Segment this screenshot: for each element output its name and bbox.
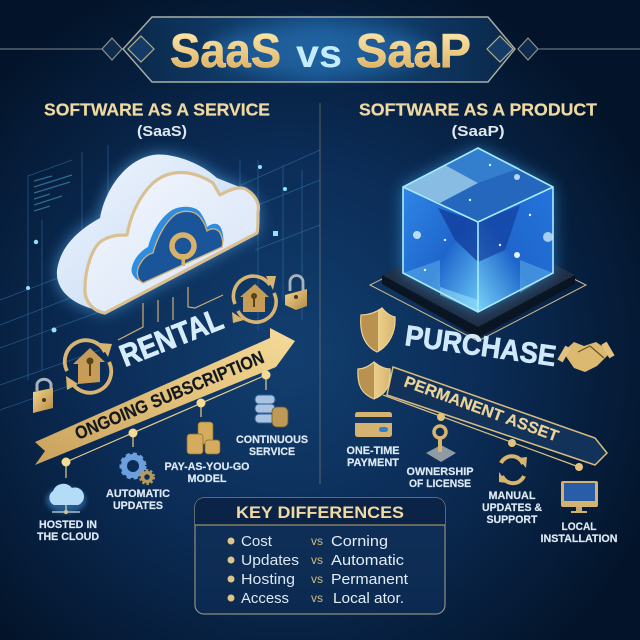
- timeline: SaaS: [62, 370, 270, 478]
- item: local installation: INSTALLATION: [540, 533, 618, 545]
- icon: handshake: [557, 342, 615, 372]
- item: pay as you go: MODEL: [188, 473, 227, 485]
- item: automatic updates: UPDATES: [113, 500, 163, 512]
- item: hosted in the cloud: THE CLOUD: [37, 531, 99, 543]
- item: ownership of license: [406, 426, 474, 490]
- glowing nodes: [26, 165, 287, 332]
- timeline: SaaP: [383, 395, 583, 471]
- item: hosted in the cloud: HOSTED IN: [39, 519, 97, 531]
- right column: Local ator.: [333, 590, 404, 607]
- panel heading: KEY DIFFERENCES: [236, 503, 404, 522]
- left column: Hosting: [241, 571, 295, 588]
- item: manual updates and support: UPDATES &: [482, 502, 542, 514]
- center divider: [319, 103, 321, 484]
- ribbon text: PERMANENT ASSET: [402, 374, 561, 446]
- circuit grid backdrop: [0, 145, 320, 410]
- item: manual updates and support: MANUAL: [488, 490, 536, 502]
- icon: shield top: [361, 308, 395, 352]
- item: one-time payment: ONE-TIME: [346, 445, 400, 457]
- heading: SaaS: [44, 100, 270, 140]
- left column: Cost: [241, 533, 273, 550]
- item: one-time payment: PAYMENT: [347, 457, 399, 469]
- platform: [370, 225, 586, 341]
- item: local installation: LOCAL: [562, 521, 597, 533]
- item: continuous service: SERVICE: [249, 446, 295, 458]
- item: manual updates and support: SUPPORT: [486, 514, 538, 526]
- ribbon: permanent asset: [387, 367, 607, 465]
- cube left face: [403, 187, 478, 312]
- heading: SaaS: SOFTWARE AS A SERVICE: [44, 100, 270, 120]
- vs column: vs: [311, 553, 323, 567]
- item: pay as you go: [164, 422, 250, 485]
- item: automatic updates: [106, 454, 170, 512]
- heading: SaaP: (SaaP): [452, 123, 505, 140]
- cube top face: [403, 148, 553, 222]
- cloud icon: [57, 154, 258, 313]
- heading: SaaS: (SaaS): [137, 123, 187, 140]
- vs column: vs: [311, 591, 323, 605]
- item: automatic updates: AUTOMATIC: [106, 488, 170, 500]
- item: local installation: [540, 481, 618, 545]
- right column: Corning: [331, 533, 388, 550]
- item: ownership of license: OWNERSHIP: [406, 466, 474, 478]
- item: continuous service: CONTINUOUS: [236, 434, 308, 446]
- left column: [241, 533, 299, 607]
- item: pay as you go: PAY-AS-YOU-GO: [164, 461, 250, 473]
- item: one-time payment: [346, 412, 400, 469]
- right column: Automatic: [331, 552, 405, 569]
- vs column: vs: [311, 534, 323, 548]
- inner blue cloud: [131, 207, 223, 283]
- cube right face: [478, 187, 553, 312]
- icon: shield bottom: [358, 362, 390, 399]
- panel: key differences: [195, 498, 445, 614]
- icon: rental cycle right: [232, 276, 276, 323]
- item: manual updates and support: [482, 456, 542, 526]
- icon: lock left: [33, 379, 53, 413]
- left column: Access: [241, 590, 289, 607]
- ribbon arrow: ongoing subscription: [35, 328, 295, 465]
- left column: Updates: [241, 552, 299, 569]
- heading: SaaP: [359, 100, 597, 140]
- title banner: [0, 17, 640, 82]
- item: continuous service: [236, 395, 308, 458]
- label: PURCHASE: PURCHASE: [403, 320, 558, 373]
- vs column: [311, 534, 323, 605]
- item: ownership of license: OF LICENSE: [409, 478, 471, 490]
- connector wires: [118, 287, 223, 340]
- label: RENTAL: RENTAL: [115, 301, 228, 374]
- vs column: vs: [311, 572, 323, 586]
- title text: SaaS: [170, 25, 281, 78]
- item: hosted in the cloud: [37, 484, 99, 543]
- ribbon text: ONGOING SUBSCRIPTION: [72, 347, 267, 444]
- bullets: [228, 538, 234, 602]
- heading: SaaP: SOFTWARE AS A PRODUCT: [359, 100, 597, 120]
- cube icon: [403, 148, 553, 312]
- title right: SaaP: [356, 25, 471, 78]
- title vs: vs: [296, 33, 342, 76]
- icon: rental cycle left: [65, 340, 112, 393]
- icon: lock right: [285, 276, 307, 310]
- right column: [331, 533, 409, 607]
- right column: Permanent: [331, 571, 409, 588]
